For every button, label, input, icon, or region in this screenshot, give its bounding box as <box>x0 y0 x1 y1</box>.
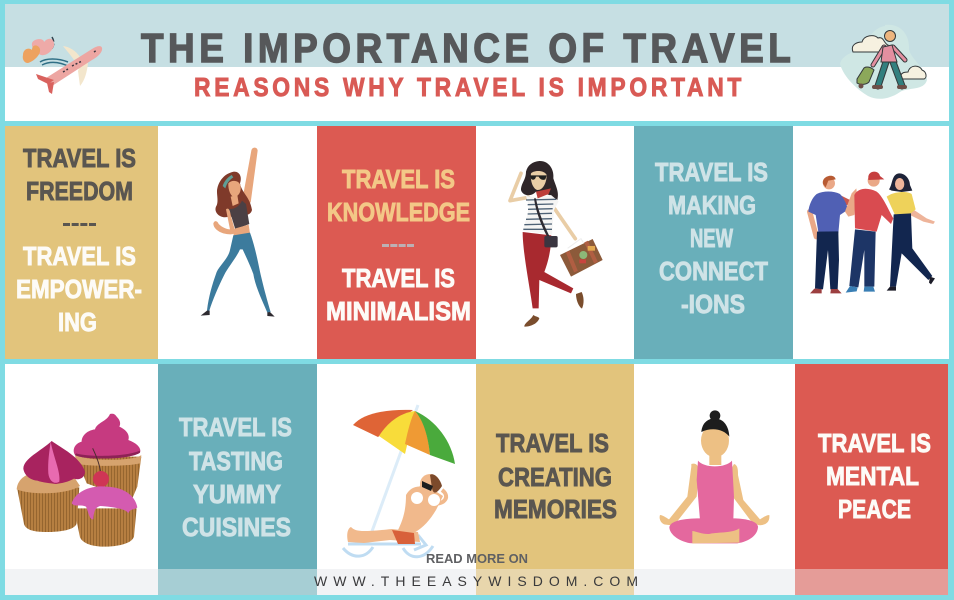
panel: three friends <box>793 126 949 359</box>
panel: tasting yummy cuisines: CUISINES <box>182 512 291 542</box>
footer band <box>5 551 948 595</box>
row two panels <box>5 364 948 595</box>
panel: knowledge and minimalism <box>317 126 476 359</box>
panel: creating memories <box>476 364 634 595</box>
panel: freedom and empowering: EMPOWER- <box>16 274 142 304</box>
website url: WWW.THEEASYWISDOM.COM <box>314 573 638 589</box>
panel: knowledge and minimalism: TRAVEL IS <box>342 164 455 194</box>
panel: mental peace: TRAVEL IS <box>818 428 931 458</box>
panel: making new connections <box>634 126 793 359</box>
panel: woman with raised arm <box>158 126 317 359</box>
panel: tasting yummy cuisines: TASTING <box>189 446 283 476</box>
subtitle: REASONS WHY TRAVEL IS IMPORTANT <box>194 74 741 102</box>
panel: making new connections: MAKING <box>668 190 756 220</box>
panel: mental peace <box>795 364 948 595</box>
panel: cupcakes <box>5 364 158 595</box>
panel: tasting yummy cuisines: YUMMY <box>193 479 281 509</box>
panel: creating memories: CREATING <box>498 462 612 492</box>
panel: man under beach umbrella <box>317 364 476 595</box>
panel: knowledge and minimalism: TRAVEL IS <box>342 263 455 293</box>
panel: freedom and empowering <box>5 126 158 359</box>
read more label: READ MORE ON <box>426 551 528 566</box>
panel: making new connections: NEW <box>690 223 733 253</box>
panel: making new connections: CONNECT <box>659 256 768 286</box>
panel: tasting yummy cuisines: TRAVEL IS <box>179 412 292 442</box>
panel: freedom and empowering: ING <box>58 307 97 337</box>
panel: tasting yummy cuisines <box>158 364 317 595</box>
panel: freedom and empowering: TRAVEL IS <box>23 143 136 173</box>
row one panels <box>5 126 949 359</box>
panel: knowledge and minimalism: MINIMALISM <box>326 296 471 326</box>
title: THE IMPORTANCE OF TRAVEL <box>141 26 791 71</box>
panel: meditating woman <box>634 364 795 595</box>
panel: knowledge and minimalism: KNOWLEDGE <box>327 197 470 227</box>
panel: creating memories: TRAVEL IS <box>496 428 609 458</box>
icon: airplane with balloons <box>23 37 102 94</box>
header <box>5 4 949 121</box>
panel: making new connections: -IONS <box>681 289 745 319</box>
panel: woman with suitcase <box>476 126 634 359</box>
panel: mental peace: PEACE <box>838 494 911 524</box>
icon: traveller with suitcase <box>840 25 927 99</box>
panel: freedom and empowering: FREEDOM <box>26 176 133 206</box>
panel: freedom and empowering: TRAVEL IS <box>23 241 136 271</box>
panel: creating memories: MEMORIES <box>494 494 617 524</box>
panel: making new connections: TRAVEL IS <box>655 157 768 187</box>
panel: mental peace: MENTAL <box>826 461 919 491</box>
